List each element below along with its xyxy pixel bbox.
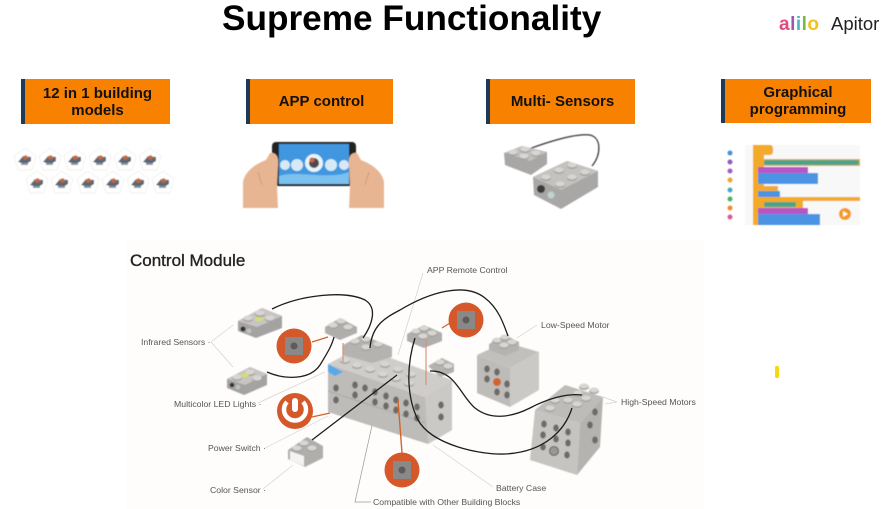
heading: Graphical programming [721, 79, 871, 123]
label: High-Speed Motors: High-Speed Motors [621, 397, 697, 407]
infrared sensor bottom [227, 367, 267, 395]
label: Compatible with Other Building Blocks: Compatible with Other Building Blocks [373, 497, 521, 507]
callout: power button [277, 393, 313, 429]
heading: Multi- Sensors [486, 79, 635, 124]
heading: Multi- Sensors: Multi- Sensors [511, 93, 614, 110]
callout: port top right [448, 302, 484, 338]
heading: 12 in 1 building models [21, 79, 170, 124]
label: Battery Case: Battery Case [496, 483, 546, 493]
color sensor [288, 437, 323, 467]
heading: 12 in 1 building models: 12 in 1 building [43, 84, 152, 102]
label: Color Sensor: Color Sensor · [210, 485, 266, 495]
connector brick right [407, 325, 442, 348]
orange callout lines [312, 323, 450, 453]
connector brick left [325, 318, 357, 340]
heading: APP control [246, 79, 393, 124]
heading: APP control: APP control [279, 93, 364, 110]
heading: 12 in 1 building models: models [71, 102, 124, 118]
label: Low-Speed Motor: Low-Speed Motor [541, 320, 610, 330]
logo [779, 13, 879, 35]
label: APP Remote Control: APP Remote Control [427, 265, 508, 275]
wires [267, 290, 582, 454]
image: graphical programming blocks [728, 145, 860, 225]
infrared sensor top [238, 308, 282, 338]
logo: Apitor [831, 13, 879, 34]
leader lines [211, 273, 617, 502]
heading: Control Module: Control Module [130, 251, 245, 270]
image: 12 building models [14, 148, 174, 193]
control module body [328, 335, 454, 444]
brick stack on module [343, 335, 392, 363]
title: Supreme Functionality [222, 0, 601, 38]
low-speed motor [477, 334, 539, 407]
high-speed motors [530, 384, 603, 475]
logo: alilo [779, 14, 820, 35]
callout: port left [276, 328, 312, 364]
yellow mark [775, 366, 779, 378]
image: hands holding phone [243, 142, 384, 208]
label: Power Switch: Power Switch · [208, 443, 266, 453]
label: Multicolor LED Lights: Multicolor LED Lights · [174, 399, 261, 409]
heading: Graphical programming: Graphical [763, 84, 833, 101]
heading: Graphical programming: programming [750, 101, 846, 118]
label: Infrared Sensors: Infrared Sensors · [141, 337, 211, 347]
image: multi sensors [504, 135, 599, 209]
callout: port bottom [384, 452, 420, 488]
diagram background [127, 240, 704, 509]
